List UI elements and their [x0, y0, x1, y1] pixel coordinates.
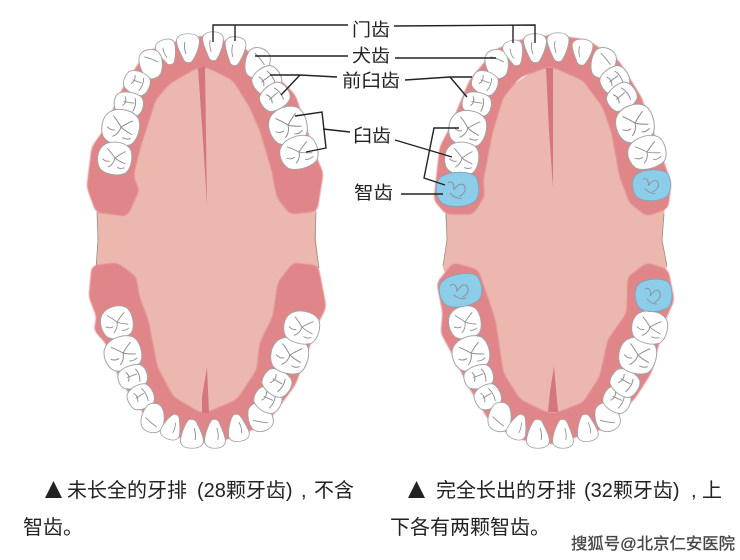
leader: incisors, right [394, 25, 535, 43]
icon: triangle marker, left [45, 481, 62, 498]
lower teeth: right diagram [446, 304, 671, 448]
caption text: right: 上 [702, 479, 722, 502]
caption text: left: , [301, 480, 307, 502]
caption text: right: , [691, 480, 697, 502]
caption text: right: 完全长出的牙排 [436, 479, 576, 502]
caption text: left: 未长全的牙排 [67, 479, 187, 502]
upper wisdom teeth (blue) [436, 170, 671, 206]
watermark: 搜狐号@北京仁安医院 [571, 535, 735, 553]
caption: right diagram [390, 479, 722, 539]
caption text: right: (32颗牙齿) [584, 479, 680, 502]
leader: premolars, right [405, 77, 472, 97]
label: molars: 臼齿 [353, 126, 391, 146]
leader: molars, right [395, 128, 459, 185]
label: premolars: 前臼齿 [342, 71, 400, 91]
upper teeth: right diagram [442, 33, 669, 177]
label: wisdom teeth: 智齿 [354, 183, 393, 203]
gums: left lower arch [89, 263, 326, 444]
leader: canines, right [395, 57, 496, 59]
leader: premolars, left [270, 75, 337, 95]
palate: right diagram [443, 60, 667, 420]
leader lines [213, 25, 535, 194]
icon: triangle marker, right [408, 481, 425, 498]
palate: left diagram [96, 60, 319, 420]
palatal raphe: right lower [548, 366, 558, 412]
palatal raphe: left upper [198, 66, 207, 207]
gums: left upper arch [87, 36, 323, 216]
caption text: right: 下各有两颗智齿。 [390, 516, 550, 539]
diagram: complete dental arches (32 teeth) [434, 33, 674, 448]
palatal raphe: right upper [546, 68, 553, 188]
caption text: left: 不含 [314, 479, 354, 502]
gums: right upper arch [434, 35, 671, 216]
caption text: left: (28颗牙齿) [197, 479, 293, 502]
caption text: left: 智齿。 [23, 516, 83, 539]
lower wisdom teeth (blue) [437, 271, 672, 312]
label: incisors: 门齿 [352, 20, 390, 40]
leader: incisors, left [213, 25, 348, 42]
diagram: incomplete dental arches (28 teeth) [87, 32, 326, 448]
caption: left diagram [23, 479, 354, 539]
label: canines: 犬齿 [352, 46, 390, 66]
leader: canines, left [255, 55, 348, 57]
upper teeth: left diagram [95, 32, 321, 177]
lower teeth: left diagram [98, 304, 323, 448]
leader: wisdom tooth [401, 193, 443, 195]
palatal raphe: left lower [202, 367, 209, 413]
gums: right lower arch [437, 263, 674, 444]
leader: molars, left [295, 112, 350, 152]
